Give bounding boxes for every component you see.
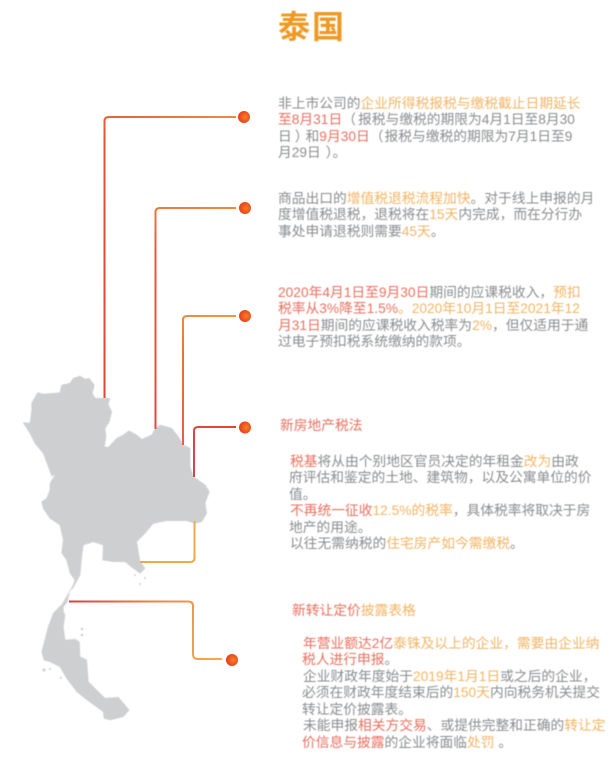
text block: transfer pricing: 价信息与披露的企业将面临处罚 。 bbox=[302, 734, 512, 750]
text block: withholding tax rate: 税率从3%降至1.5%。2020年10月1日至2021年12 bbox=[278, 301, 580, 316]
map of Thailand bbox=[23, 376, 209, 720]
connector 4 lower segment bbox=[140, 521, 194, 562]
text block: transfer pricing: 年营业额达2亿泰铢及以上的企业，需要由企业纳 bbox=[303, 636, 599, 650]
text block: VAT refund bbox=[278, 190, 594, 238]
connector 3 bbox=[183, 310, 251, 445]
text block: property tax: 以往无需纳税的住宅房产如今需缴税。 bbox=[290, 536, 524, 551]
text block: transfer pricing: 必须在财政年度结束后的150天内向税务机关提交 bbox=[302, 685, 600, 700]
connector 5 bbox=[69, 602, 238, 666]
connector 1 bbox=[104, 111, 250, 398]
text block: property tax: 府评估和鉴定的土地、建筑物，以及公寓单位的价 bbox=[289, 470, 592, 485]
text block: transfer pricing bbox=[302, 636, 606, 750]
connector 4 bbox=[194, 422, 251, 477]
text block: property tax: 值。 bbox=[289, 486, 317, 502]
text block: corporate income tax deadline: 非上市公司的企业所得税报税与缴税截止日期延长 bbox=[278, 96, 581, 110]
title: 泰国 bbox=[278, 9, 346, 45]
text block: withholding tax rate: 月31日期间的应课税收入税率为2%，但仅适用于通 bbox=[278, 318, 588, 332]
text block: withholding tax rate bbox=[278, 284, 588, 349]
text block: VAT refund: 事处申请退税则需要45天。 bbox=[278, 224, 445, 238]
text block: transfer pricing: 税人进行申报。 bbox=[302, 652, 398, 667]
text block: property tax: 不再统一征收12.5%的税率，具体税率将取决于房 bbox=[290, 503, 590, 518]
text block: property tax: 地产的用途。 bbox=[289, 520, 372, 534]
connector 2 bbox=[156, 202, 251, 429]
text block: property tax bbox=[289, 454, 592, 551]
heading: new property tax law: 新房地产税法 bbox=[280, 418, 363, 433]
text block: corporate income tax deadline bbox=[278, 96, 581, 160]
text block: transfer pricing: 未能申报相关方交易、或提供完整和正确的转让定 bbox=[303, 718, 606, 733]
text block: property tax: 税基将从由个别地区官员决定的年租金改为由政 bbox=[290, 454, 579, 468]
text block: transfer pricing: 转让定价披露表。 bbox=[302, 702, 412, 716]
text block: withholding tax rate: 过电子预扣税系统缴纳的款项。 bbox=[278, 334, 471, 349]
text block: transfer pricing: 企业财政年度始于2019年1月1日或之后的企业， bbox=[303, 668, 596, 684]
text block: corporate income tax deadline: 月29日 ）。 bbox=[278, 145, 346, 160]
text block: VAT refund: 度增值税退税，退税将在15天内完成，而在分行办 bbox=[278, 207, 582, 222]
text block: corporate income tax deadline: 至8月31日（报税与缴税的期限为4月1日至8月30 bbox=[278, 112, 575, 127]
heading: new transfer pricing form: 新转让定价披露表格 bbox=[292, 603, 416, 618]
text block: withholding tax rate: 2020年4月1日至9月30日期间的应课税收入，预扣 bbox=[278, 284, 581, 300]
text block: corporate income tax deadline: 日）和9月30日（报税与缴税的期限为7月1日至9 bbox=[278, 128, 572, 144]
text block: VAT refund: 商品出口的增值税退税流程加快。对于线上申报的月 bbox=[278, 190, 594, 206]
